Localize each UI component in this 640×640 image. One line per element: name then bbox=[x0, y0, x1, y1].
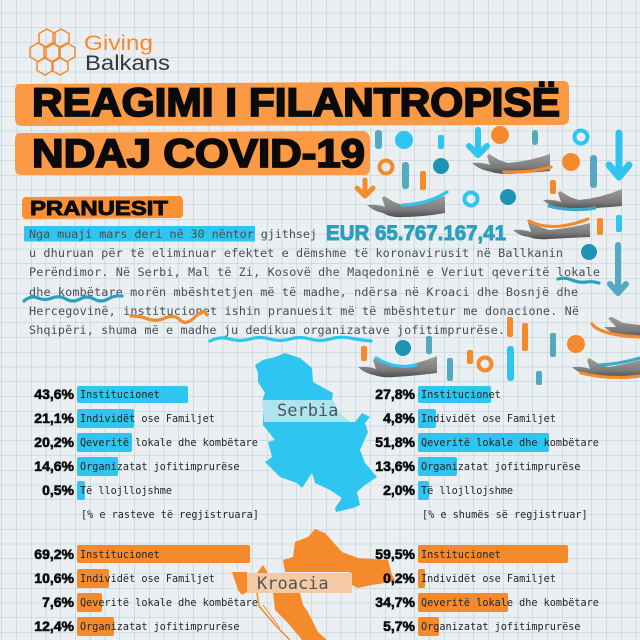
chart: Croatia, cases: 10,6% bbox=[34, 570, 75, 586]
chart: Croatia, amounts: Institucionet bbox=[421, 550, 501, 561]
chart: Serbia, amounts: 27,8% bbox=[375, 386, 416, 402]
chart: Serbia, cases: 21,1% bbox=[34, 410, 75, 426]
chart: Croatia, amounts: 0,2% bbox=[383, 570, 416, 586]
title bbox=[15, 81, 569, 176]
section heading: PRANUESIT: PRANUESIT bbox=[30, 198, 168, 220]
chart: Serbia, amounts: Institucionet bbox=[421, 390, 501, 401]
chart: Serbia, cases: 20,2% bbox=[34, 434, 75, 450]
logo: Giving Balkans: Giving bbox=[84, 32, 153, 55]
chart: Croatia, cases: 7,6% bbox=[42, 594, 75, 610]
logo: Giving Balkans: Balkans bbox=[85, 52, 170, 75]
chart: Serbia, cases: 14,6% bbox=[34, 458, 75, 474]
chart: Serbia, amounts: Qeveritë lokale dhe kombëtare bbox=[421, 438, 599, 449]
chart: Croatia, amounts: 59,5% bbox=[375, 546, 416, 562]
decorative scattered shapes: coins, bars and arrows bbox=[357, 126, 629, 385]
chart: Serbia, amounts: 4,8% bbox=[383, 410, 416, 426]
title: REAGIMI I FILANTROPISË bbox=[32, 81, 560, 125]
chart: Serbia, amounts: 13,6% bbox=[375, 458, 416, 474]
chart: Croatia, amounts: Qeveritë lokale dhe kombëtare bbox=[421, 598, 599, 609]
chart: Serbia, amounts: [% e shumës së regjistruar] bbox=[422, 510, 588, 521]
chart: Croatia, cases: Individët ose Familjet bbox=[80, 574, 215, 585]
hands with coloured brush strokes bbox=[358, 154, 640, 378]
chart: Croatia, cases: 12,4% bbox=[34, 618, 75, 634]
map: Croatia bbox=[232, 529, 395, 640]
chart: Serbia, amounts: Organizatat jofitimprurëse bbox=[421, 462, 580, 473]
chart: Croatia, cases bbox=[34, 545, 258, 636]
amount: EUR 65.767.167,41: EUR 65.767.167,41 bbox=[326, 222, 506, 245]
chart: Croatia, cases: Institucionet bbox=[80, 550, 160, 561]
intro text block: Hercegovinë, institucionet ishin pranuesit më të mbështetur me donacione. Në bbox=[29, 304, 579, 318]
chart: Serbia, amounts bbox=[375, 386, 599, 521]
intro text block: Shqipëri, shuma më e madhe ju dedikua organizatave jofitimprurëse. bbox=[29, 323, 505, 337]
intro text block: u dhuruan për të eliminuar efektet e dëmshme të koronavirusit në Ballkanin bbox=[29, 246, 563, 260]
chart: Serbia, cases: Institucionet bbox=[80, 390, 160, 401]
chart: Serbia, cases: Qeveritë lokale dhe kombëtare bbox=[80, 438, 258, 449]
chart: Croatia, amounts: 5,7% bbox=[383, 618, 416, 634]
chart: Croatia, amounts bbox=[375, 545, 599, 636]
chart: Serbia, cases: Organizatat jofitimprurëse bbox=[80, 462, 239, 473]
chart: Serbia, amounts: Individët ose Familjet bbox=[421, 414, 556, 425]
title: NDAJ COVID-19 bbox=[32, 132, 365, 176]
chart: Serbia, cases: 0,5% bbox=[42, 482, 75, 498]
map: Croatia: Kroacia bbox=[257, 574, 329, 594]
intro text block: Nga muaji mars deri në 30 nëntor gjithsej bbox=[29, 227, 317, 241]
section heading: PRANUESIT bbox=[22, 196, 183, 220]
chart: Croatia, cases: 69,2% bbox=[34, 546, 75, 562]
chart: Serbia, cases: Individët ose Familjet bbox=[80, 414, 215, 425]
chart: Croatia, amounts: Individët ose Familjet bbox=[421, 574, 556, 585]
map: Serbia bbox=[255, 353, 377, 512]
intro text block: Perëndimor. Në Serbi, Mal të Zi, Kosovë dhe Maqedoninë e Veriut qeveritë lokale bbox=[29, 265, 600, 279]
chart: Serbia, cases: 43,6% bbox=[34, 386, 75, 402]
chart: Serbia, amounts: 51,8% bbox=[375, 434, 416, 450]
chart: Serbia, cases: Të llojllojshme bbox=[80, 486, 172, 497]
chart: Serbia, amounts: 2,0% bbox=[383, 482, 416, 498]
chart: Croatia, cases: Organizatat jofitimprurëse bbox=[80, 622, 239, 633]
map: Serbia: Serbia bbox=[277, 401, 338, 421]
chart: Croatia, cases: Qeveritë lokale dhe kombëtare bbox=[80, 598, 258, 609]
chart: Serbia, cases: [% e rasteve të regjistruara] bbox=[81, 510, 259, 521]
chart: Croatia, amounts: 34,7% bbox=[375, 594, 416, 610]
intro text block: dhe kombëtare morën mbështetjen më të madhe, ndërsa në Kroaci dhe Bosnjë dhe bbox=[29, 285, 578, 299]
logo: Giving Balkans bbox=[30, 29, 170, 75]
hand-drawn underlines bbox=[24, 278, 599, 341]
chart: Croatia, amounts: Organizatat jofitimprurëse bbox=[421, 622, 580, 633]
chart: Serbia, amounts: Të llojllojshme bbox=[421, 486, 513, 497]
intro text block bbox=[24, 226, 600, 337]
chart: Serbia, cases bbox=[34, 386, 259, 521]
